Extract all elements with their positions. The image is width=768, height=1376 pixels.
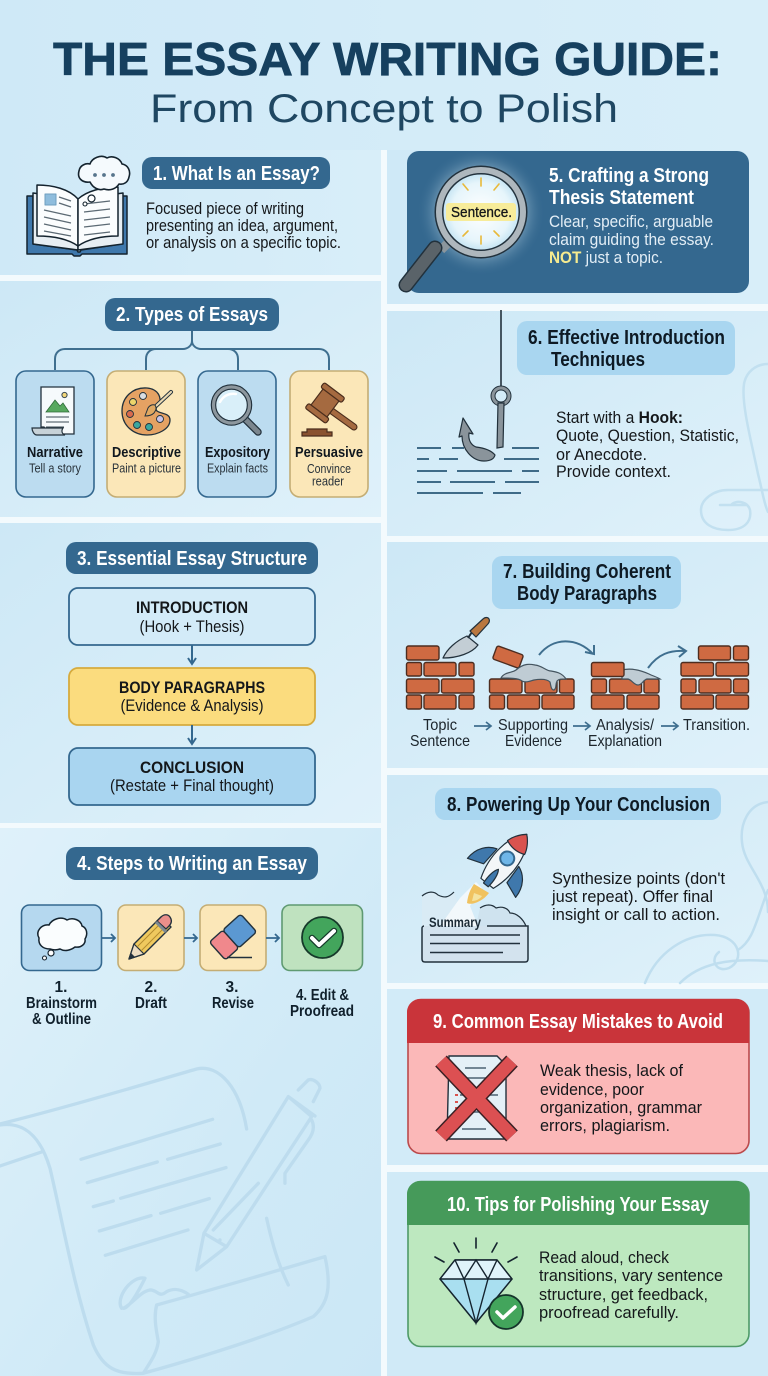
- watermark: scroll and pen: [0, 1068, 328, 1374]
- card: narrative: [16, 371, 94, 497]
- label: topic sentence: Topic: [423, 717, 457, 734]
- card: descriptive: [107, 371, 185, 497]
- icon: fishing hook in water: [417, 310, 539, 493]
- label: analysis explanation: Analysis/: [596, 717, 654, 734]
- panel background: section 2: [0, 281, 381, 517]
- card: expository: [198, 371, 276, 497]
- icon: diamond with check: [435, 1238, 523, 1329]
- label: topic sentence: Sentence: [410, 733, 470, 750]
- heading: 5: [549, 164, 709, 209]
- text block: conclusion advice: [551, 870, 725, 924]
- card: narrative: Tell a story: [29, 462, 82, 476]
- heading pill: 6: Techniques: [551, 348, 645, 371]
- text block: tips: structure, get feedback,: [539, 1286, 708, 1304]
- text block: mistakes: errors, plagiarism.: [540, 1117, 670, 1135]
- card: persuasive: Persuasive: [295, 444, 363, 461]
- text block: tips: transitions, vary sentence: [539, 1267, 723, 1285]
- icon: trowel: [443, 618, 489, 658]
- box: body paragraphs: (Evidence & Analysis): [120, 697, 264, 715]
- panel: 10 polishing tips: [407, 1181, 749, 1346]
- arrow: evidence to analysis: [573, 722, 590, 730]
- step 1: brainstorm: 1.: [55, 979, 67, 996]
- label: analysis explanation: [588, 717, 662, 750]
- heading pill: 8: 8. Powering Up Your Conclusion: [447, 793, 710, 816]
- heading pill: 7: Body Paragraphs: [517, 582, 657, 605]
- card: expository: Explain facts: [207, 462, 268, 476]
- panel background: section 10: [387, 1172, 768, 1376]
- step 4: edit and proofread: 4. Edit &: [296, 987, 349, 1004]
- step 3: revise: Revise: [212, 995, 254, 1012]
- arrow: curved evidence to analysis: [539, 641, 594, 655]
- panel: 5 thesis statement: [406, 148, 749, 293]
- text block: conclusion advice: Synthesize points (don't: [552, 870, 725, 888]
- arrow: analysis to transition: [661, 722, 678, 730]
- panel: 4 steps to writing an essay: [22, 847, 362, 1028]
- label: analysis explanation: Explanation: [588, 733, 662, 750]
- box: conclusion: (Restate + Final thought): [110, 777, 274, 795]
- panel background: section 3: [0, 523, 381, 823]
- icon: rocket launching from summary: Summary: [429, 915, 481, 930]
- icon: open book with thought cloud: [27, 156, 130, 256]
- text block: definition: Focused piece of writing: [146, 200, 304, 218]
- panel background: section 1: [0, 0, 381, 275]
- card: persuasive: reader: [312, 474, 344, 488]
- heading pill: 2: 2. Types of Essays: [116, 303, 268, 326]
- card: persuasive: [290, 371, 368, 497]
- step 3: revise: [200, 905, 266, 1012]
- panel: 7 body paragraphs: [406, 556, 750, 750]
- heading pill: 6: [517, 321, 735, 375]
- heading pill: 7: [492, 556, 681, 609]
- text block: hook techniques: Provide context.: [556, 463, 671, 481]
- box: introduction: (Hook + Thesis): [140, 618, 244, 636]
- panel: 9 common mistakes: [407, 999, 749, 1154]
- panel: 2 types of essays: [16, 298, 368, 497]
- brick wall: transition: [681, 646, 748, 709]
- header background band: [0, 0, 768, 150]
- heading: 5: 5. Crafting a Strong: [549, 164, 709, 187]
- watermark: swirl in section 8: [645, 802, 768, 983]
- brick wall: supporting evidence with mortar: [490, 646, 574, 709]
- panel: 1 what is an essay: [27, 156, 341, 256]
- step 1: brainstorm: Brainstorm: [26, 995, 97, 1012]
- text block: mistakes: Weak thesis, lack of: [540, 1062, 683, 1080]
- heading: 5: Thesis Statement: [549, 186, 694, 209]
- panel background: section 5: [387, 0, 768, 304]
- text block: conclusion advice: insight or call to action.: [552, 906, 720, 924]
- panel background: section 4: [0, 828, 381, 1376]
- label: supporting evidence: Evidence: [505, 733, 562, 750]
- step 4: edit and proofread: Proofread: [290, 1003, 354, 1020]
- arrow: step 2 to 3: [184, 934, 197, 942]
- heading pill: 3: 3. Essential Essay Structure: [77, 547, 307, 570]
- panel background: section 6: [387, 311, 768, 536]
- label: supporting evidence: [498, 717, 568, 750]
- arrow: introduction to body: [188, 645, 196, 664]
- text block: tips: [539, 1249, 723, 1322]
- arrow: step 3 to 4: [266, 934, 279, 942]
- text block: thesis definition: Clear, specific, arguable: [549, 213, 713, 231]
- text block: definition: [146, 200, 341, 252]
- title: [53, 33, 722, 131]
- step 1: brainstorm: & Outline: [32, 1011, 91, 1028]
- arrow: body to conclusion: [188, 725, 196, 744]
- connector tree: [55, 331, 329, 370]
- card: persuasive: Convince: [307, 462, 351, 476]
- icon: magnifying glass on sentence: Sentence.: [451, 205, 512, 221]
- box: conclusion: CONCLUSION: [140, 759, 244, 777]
- text block: conclusion advice: just repeat). Offer final: [551, 888, 713, 906]
- heading bar: 10: 10. Tips for Polishing Your Essay: [447, 1193, 709, 1216]
- title: From Concept to Polish: [150, 87, 618, 131]
- heading pill: 7: 7. Building Coherent: [503, 560, 671, 583]
- title: THE ESSAY WRITING GUIDE:: [53, 33, 722, 85]
- heading bar: 10: [407, 1181, 749, 1225]
- text block: thesis definition: NOT just a topic.: [549, 249, 663, 267]
- box: introduction: [69, 588, 315, 645]
- text block: mistakes: organization, grammar: [540, 1099, 702, 1117]
- text block: tips: Read aloud, check: [539, 1249, 670, 1267]
- text block: mistakes: [540, 1062, 702, 1135]
- panel: 3 essential essay structure: [66, 542, 318, 805]
- icon: magnifying glass on sentence: [406, 148, 545, 285]
- step 4: edit and proofread: [282, 905, 362, 1020]
- heading pill: 6: 6. Effective Introduction: [528, 326, 725, 349]
- text block: mistakes: evidence, poor: [540, 1081, 644, 1099]
- label: topic sentence: [410, 717, 470, 750]
- panel background: section 8: [387, 775, 768, 983]
- text block: hook techniques: or Anecdote.: [556, 446, 647, 464]
- text block: hook techniques: [556, 409, 739, 481]
- label: supporting evidence: Supporting: [498, 717, 568, 734]
- box: body paragraphs: BODY PARAGRAPHS: [119, 679, 265, 697]
- arrow: step 1 to 2: [102, 934, 115, 942]
- box: introduction: INTRODUCTION: [136, 599, 248, 617]
- heading pill: 3: [66, 542, 318, 574]
- arrow: topic to evidence: [474, 722, 491, 730]
- heading bar: 9: [407, 999, 749, 1043]
- label: transition: Transition.: [683, 717, 750, 734]
- box: body paragraphs: [69, 668, 315, 725]
- icon: crossed-out document: [441, 1056, 512, 1139]
- panel background: section 7: [387, 542, 768, 768]
- step 1: brainstorm: [22, 905, 102, 1028]
- heading pill: 1: [142, 157, 330, 189]
- text block: thesis definition: [549, 213, 714, 267]
- text block: thesis definition: claim guiding the essay.: [549, 231, 714, 249]
- card: descriptive: Descriptive: [112, 444, 181, 461]
- step 2: draft: [118, 905, 184, 1012]
- card: narrative: Narrative: [27, 444, 83, 461]
- text block: definition: presenting an idea, argument,: [146, 217, 338, 235]
- step 3: revise: 3.: [226, 979, 238, 996]
- arrow: curved analysis to transition: [648, 646, 686, 668]
- heading pill: 4: 4. Steps to Writing an Essay: [77, 852, 307, 875]
- text block: hook techniques: Quote, Question, Statistic,: [556, 427, 739, 445]
- step 2: draft: Draft: [135, 995, 167, 1012]
- brick wall: analysis: [592, 662, 660, 709]
- card: descriptive: Paint a picture: [112, 462, 181, 476]
- watermark: scroll in section 6: [701, 364, 768, 530]
- box: conclusion: [69, 748, 315, 805]
- heading pill: 1: 1. What Is an Essay?: [153, 162, 320, 185]
- text block: tips: proofread carefully.: [539, 1304, 679, 1322]
- text block: definition: or analysis on a specific topic.: [146, 234, 341, 252]
- card: expository: Expository: [205, 444, 271, 461]
- panel: 6 introduction techniques: [417, 310, 739, 493]
- text block: hook techniques: Start with a Hook:: [556, 409, 683, 427]
- icon: rocket launching from summary: [422, 815, 551, 962]
- heading pill: 8: [435, 788, 721, 820]
- heading pill: 2: [105, 298, 279, 331]
- heading pill: 4: [66, 847, 318, 880]
- step 2: draft: 2.: [145, 979, 157, 996]
- panel background: section 9: [387, 989, 768, 1165]
- panel: 8 conclusion: [422, 788, 725, 962]
- brick wall: topic sentence: [406, 646, 474, 709]
